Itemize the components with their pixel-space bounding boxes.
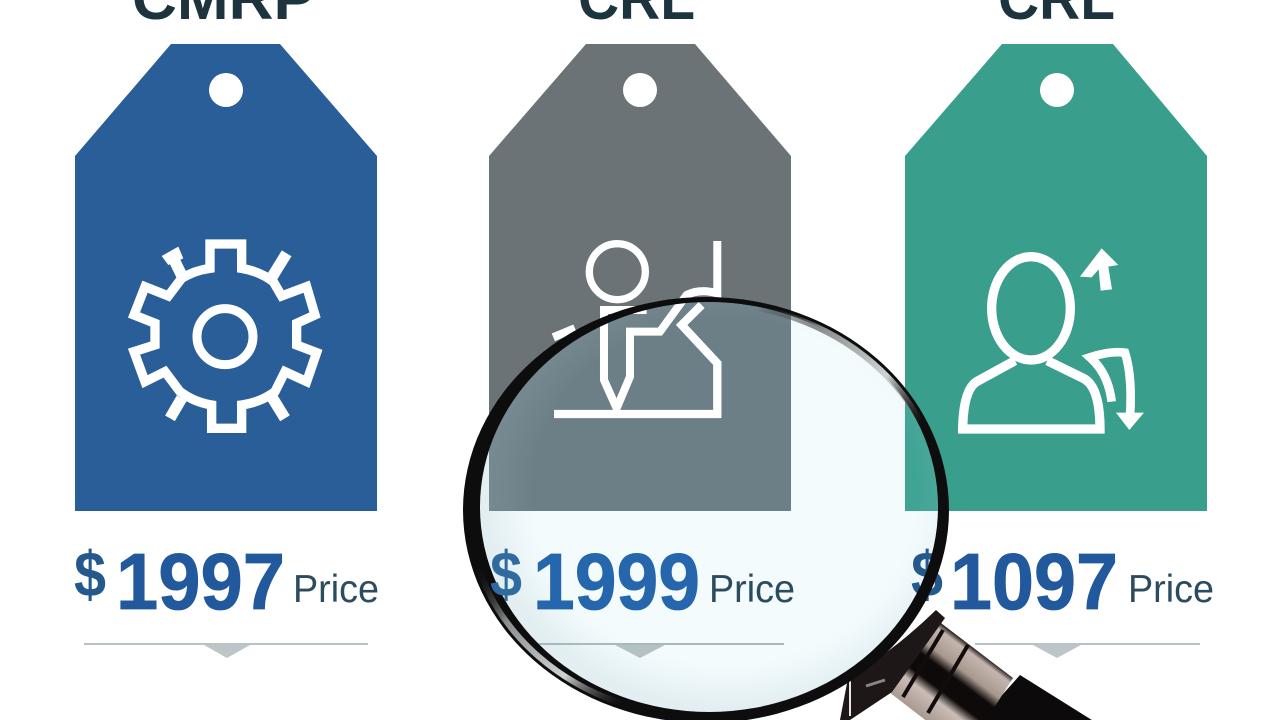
currency symbol: $ <box>490 538 522 610</box>
neck <box>840 610 945 720</box>
currency symbol: $ <box>74 538 106 610</box>
price: 1997 <box>74 537 379 626</box>
handle collar <box>889 617 1013 720</box>
amount: 1997 <box>116 537 285 626</box>
amount: 1097 <box>950 537 1118 626</box>
price: 1097 amount <box>950 537 1214 626</box>
icon: person with arrows <box>963 248 1144 430</box>
collar bands <box>903 630 968 713</box>
price label: Price <box>293 568 379 611</box>
magnified tag area <box>480 280 960 712</box>
magnifier handle <box>840 610 1095 720</box>
price label: Price <box>709 568 795 611</box>
price: 1999 <box>490 537 795 626</box>
handle grip <box>978 675 1095 720</box>
icon: person drawing <box>553 241 717 414</box>
price tag: blue <box>75 44 377 511</box>
price tag: teal <box>905 44 1207 511</box>
divider with pointer: teal <box>975 644 1200 658</box>
divider with pointer: blue <box>84 644 368 658</box>
price tag: gray <box>489 44 791 511</box>
amount: 1999 <box>533 537 700 626</box>
magnifier glass <box>480 302 938 712</box>
magnifier rim <box>463 297 949 720</box>
price label: Price <box>1128 568 1214 611</box>
icon: gear <box>134 244 317 428</box>
price: teal currency symbol: $ <box>911 538 943 610</box>
